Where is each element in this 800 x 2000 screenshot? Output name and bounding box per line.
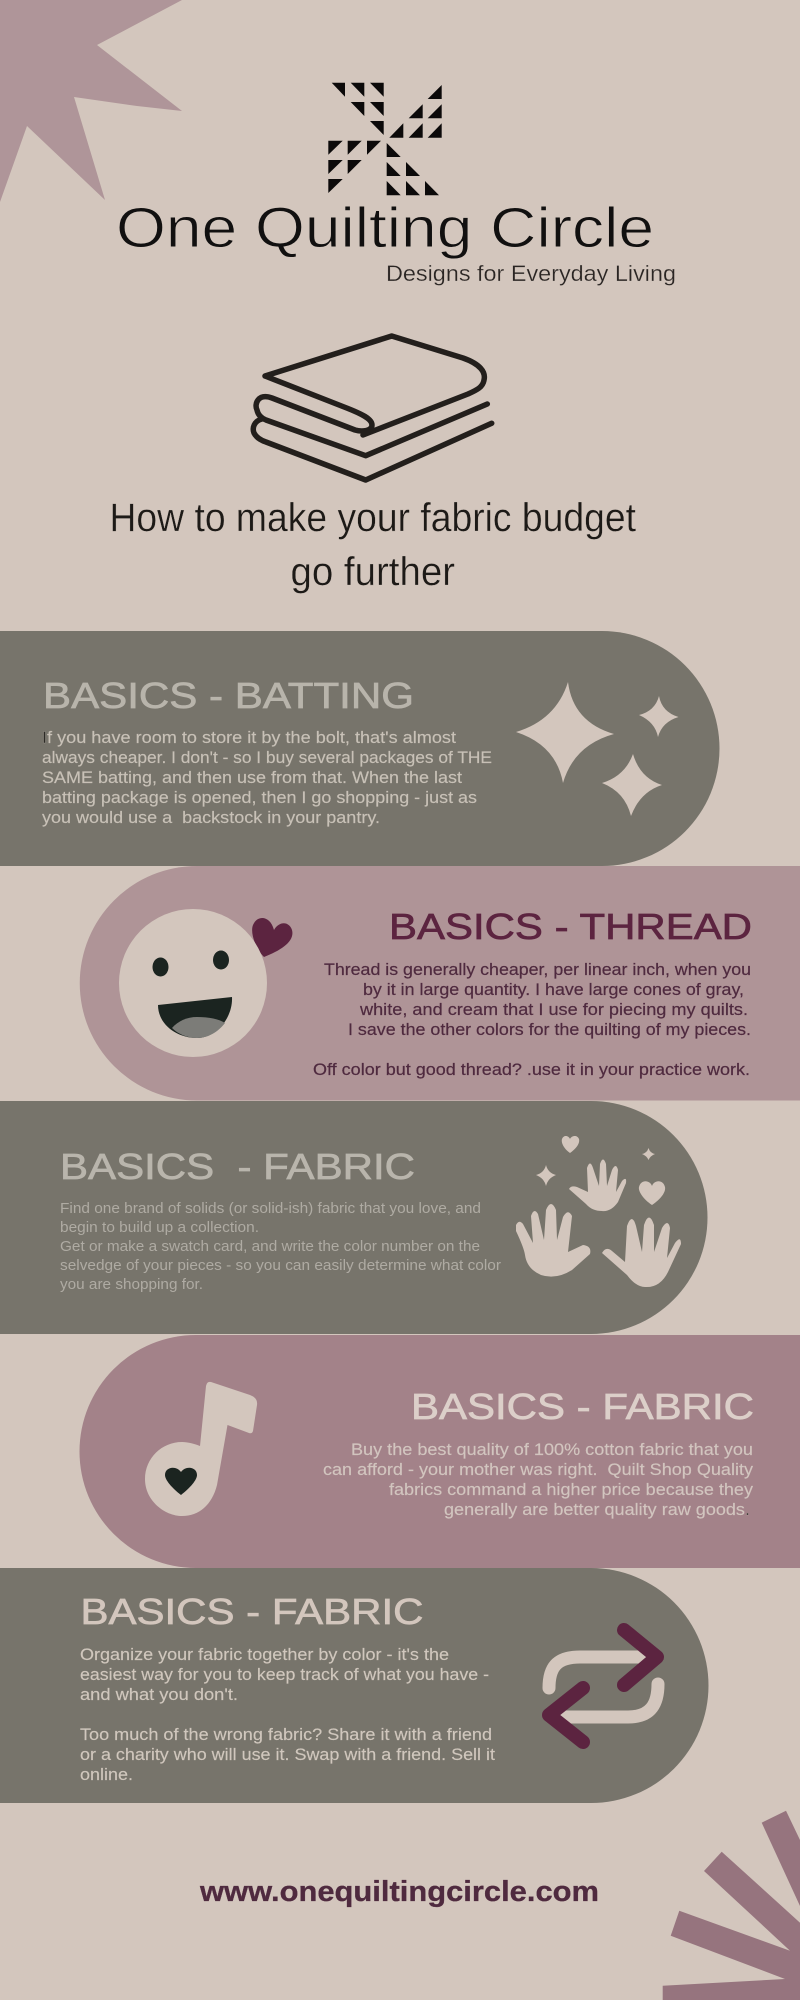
website link: www.onequiltingcircle.com — [199, 1876, 599, 1908]
text block: organize and share — [80, 1646, 495, 1784]
heading: basics fabric: BASICS - FABRIC — [411, 1386, 754, 1427]
icon: music note with heart — [145, 1382, 257, 1516]
heading: basics thread: BASICS - THREAD — [389, 906, 752, 947]
text block: organize and share: and what you don't. — [80, 1686, 238, 1704]
text block: cotton quality: generally are better quality raw goods . — [444, 1501, 750, 1519]
icon: hands with hearts and sparkles — [516, 1136, 681, 1287]
text block: batting: you would use a backstock in your pantry. — [42, 809, 380, 827]
text block: organize and share: or a charity who will use it. Swap with a friend. Sell it — [80, 1746, 495, 1764]
icon: swap arrows — [549, 1630, 658, 1742]
heading: basics batting: BASICS - BATTING — [43, 675, 414, 716]
heading: basics fabric: BASICS - FABRIC — [60, 1146, 415, 1187]
text block: thread — [313, 961, 751, 1079]
text block: organize and share: Too much of the wrong fabric? Share it with a friend — [80, 1726, 492, 1744]
text block: organize and share: easiest way for you to keep track of what you have - — [80, 1666, 489, 1684]
icon: smiling face — [119, 909, 267, 1057]
panel: basics thread — [80, 866, 800, 1100]
text block: batting — [42, 729, 492, 827]
heading: how to make your fabric budget go further: go further — [290, 550, 455, 594]
heading: how to make your fabric budget go further: How to make your fabric budget — [110, 496, 636, 540]
text block: solids and swatch card: you are shopping for. — [60, 1276, 203, 1293]
text block: thread: by it in large quantity. I have large cones of gray, — [363, 981, 744, 999]
text block: batting: batting package is opened, then I go shopping - just as — [42, 789, 477, 807]
heading: how to make your fabric budget go further — [110, 496, 636, 594]
text block: batting: If you have room to store it by the bolt, that's almost — [42, 729, 456, 747]
text block: thread: Thread is generally cheaper, per linear inch, when you — [324, 961, 751, 979]
text block: thread: white, and cream that I use for piecing my quilts. — [359, 1001, 748, 1019]
panel: basics fabric quality — [80, 1335, 800, 1568]
icon: sparkles — [516, 682, 678, 816]
text block: cotton quality: can afford - your mother was right. Quilt Shop Quality — [323, 1461, 754, 1479]
text block: thread: Off color but good thread? .use it in your practice work. — [313, 1061, 750, 1079]
decorative starburst: bottom right — [663, 1811, 800, 2000]
text block: cotton quality: fabrics command a higher price because they — [389, 1481, 754, 1499]
text block: cotton quality: Buy the best quality of 100% cotton fabric that you — [351, 1441, 753, 1459]
text block: solids and swatch card: Get or make a swatch card, and write the color number on the — [60, 1238, 480, 1255]
text block: organize and share: online. — [80, 1766, 133, 1784]
text block: organize and share: Organize your fabric together by color - it's the — [80, 1646, 449, 1664]
logo: pinwheel quilt block — [328, 83, 442, 195]
heading: basics fabric: BASICS - FABRIC — [80, 1591, 424, 1632]
icon: heart — [252, 918, 292, 957]
text block: thread: I save the other colors for the quilting of my pieces. — [348, 1021, 751, 1039]
panel: basics fabric organize — [0, 1568, 708, 1803]
text block: batting: SAME batting, and then use from that. When the last — [42, 769, 462, 787]
icon: folded fabric stack — [253, 336, 492, 480]
tagline: Designs for Everyday Living — [386, 261, 676, 286]
text block: solids and swatch card: selvedge of your pieces - so you can easily determine what color — [60, 1257, 501, 1274]
title: brand name: One Quilting Circle — [116, 196, 654, 260]
text block: solids and swatch card: begin to build up a collection. — [60, 1219, 259, 1236]
panel: basics batting — [0, 631, 720, 866]
panel: basics fabric solids — [0, 1101, 708, 1334]
decorative starburst: top left — [0, 0, 182, 202]
text block: batting: always cheaper. I don't - so I buy several packages of THE — [42, 749, 492, 767]
text block: solids and swatch card — [60, 1200, 501, 1293]
text block: solids and swatch card: Find one brand of solids (or solid-ish) fabric that you love, and — [60, 1200, 481, 1217]
text block: cotton quality — [323, 1441, 754, 1519]
